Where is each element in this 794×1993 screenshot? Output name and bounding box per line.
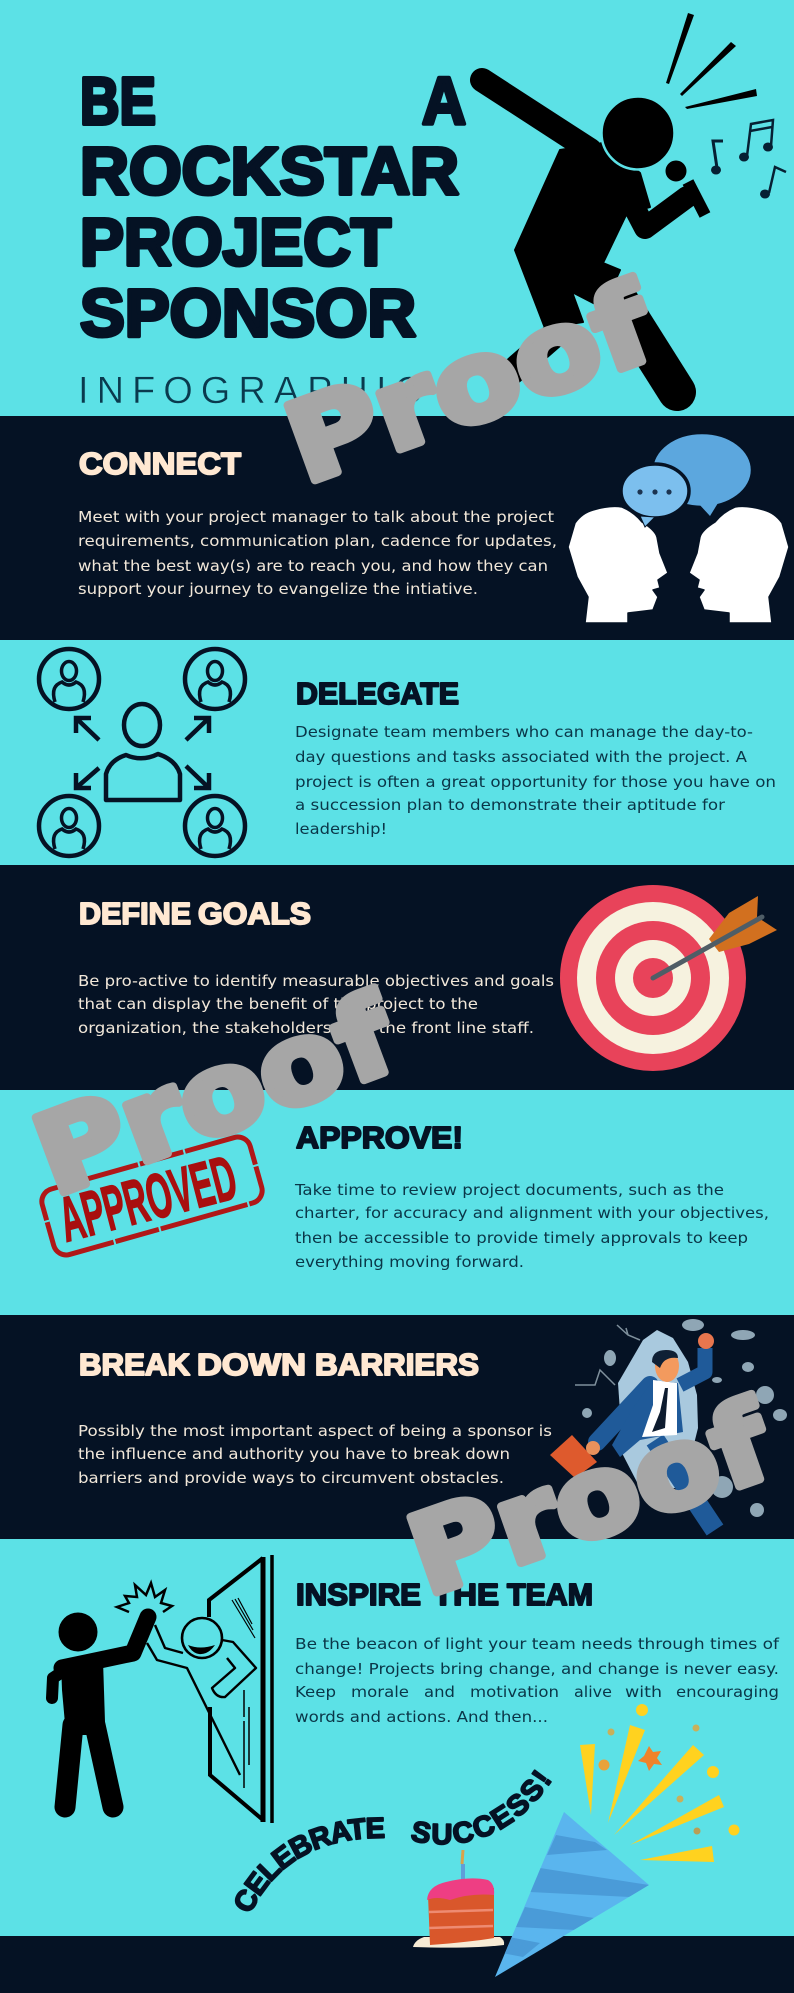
heading: break down barriers: BREAK [79, 1347, 191, 1382]
text: define goals: organization, the stakeholders, and the front line staff. [78, 1019, 534, 1037]
text: inspire the team: morale [351, 1683, 409, 1701]
text: break down barriers: the influence and authority you have to break down [78, 1445, 510, 1463]
text: connect: support your journey to evangelize the intiative. [78, 580, 478, 598]
watermark: proof top: Proof [270, 259, 670, 509]
text: inspire the team: with [625, 1683, 662, 1701]
panel: connect [78, 433, 789, 623]
text: inspire the team: motivation [470, 1683, 559, 1701]
text: delegate: a succession plan to demonstrate their aptitude for [295, 796, 726, 814]
text: approve: everything moving forward. [295, 1253, 524, 1271]
curved text: celebrate success: CELEBRATE [234, 1816, 385, 1912]
text: connect: Meet with your project manager to talk about the project [78, 508, 554, 526]
subtitle: INFOGRAPHIC [78, 370, 422, 412]
title [80, 64, 466, 351]
text: define goals [78, 972, 554, 1037]
icon: singing rockstar [482, 13, 786, 392]
icon: high five through mirror [52, 1555, 272, 1823]
text: define goals: Be pro-active to identify measurable objectives and goals [78, 972, 554, 990]
text: break down barriers: barriers and provide ways to circumvent obstacles. [78, 1469, 504, 1487]
heading: define goals [79, 896, 311, 931]
icon: businessman breaking through wall [550, 1319, 787, 1530]
heading: break down barriers: BARRIERS [315, 1347, 479, 1382]
text: connect [78, 508, 557, 598]
text: inspire the team: Be the beacon of light your team needs through times of [295, 1635, 780, 1653]
watermark: proof middle: Proof [18, 970, 412, 1221]
heading: break down barriers: DOWN [197, 1347, 306, 1382]
panel: break down barriers [78, 1319, 787, 1530]
curved text: celebrate success: SUCCESS! [410, 1769, 552, 1846]
text: delegate: day questions and tasks associated with the project. A [295, 748, 748, 766]
heading: inspire the team [296, 1577, 593, 1612]
title: A [422, 64, 466, 139]
heading: connect: CONNECT [79, 446, 241, 481]
curved text: celebrate success [234, 1769, 552, 1912]
heading: inspire the team: INSPIRE [296, 1577, 421, 1612]
heading: approve: APPROVE! [296, 1120, 463, 1155]
title: BE [80, 64, 156, 139]
heading: inspire the team: TEAM [507, 1577, 593, 1612]
watermark: proof bottom: Proof [393, 1376, 788, 1621]
icon: target with arrow [560, 885, 777, 1071]
text: approve: charter, for accuracy and alignment with your objectives, [295, 1204, 769, 1222]
heading: define goals: DEFINE [79, 896, 191, 931]
icon: approved stamp [39, 1134, 265, 1258]
text: delegate: project is often a great opportunity for those you have on [295, 773, 776, 791]
icon: delegating person [39, 649, 245, 856]
text: approve [294, 1181, 769, 1271]
text: inspire the team: Keep [295, 1683, 336, 1701]
heading: delegate: DELEGATE [296, 676, 459, 711]
text: inspire the team: alive [574, 1683, 612, 1701]
text: connect: requirements, communication plan, cadence for updates, [78, 532, 557, 550]
panel: approve [39, 1120, 769, 1271]
title: SPONSOR [80, 276, 416, 351]
panel: delegate [39, 649, 776, 856]
text: inspire the team: words and actions. And then... [295, 1708, 548, 1726]
panel: define goals [78, 885, 777, 1071]
text: define goals: that can display the benefit of the project to the [78, 995, 478, 1013]
text: delegate: leadership! [295, 820, 387, 838]
icon: talking heads [568, 433, 789, 623]
text: inspire the team: change! Projects bring change, and change is never easy. [295, 1660, 779, 1678]
heading: define goals: GOALS [198, 896, 311, 931]
icon: confetti [580, 1704, 740, 1862]
title: PROJECT [80, 205, 391, 280]
text: approve: then be accessible to provide timely approvals to keep [295, 1229, 748, 1247]
icon: approved stamp: APPROVED [52, 1143, 244, 1256]
icon: party popper cone [495, 1812, 649, 1977]
text: connect: what the best way(s) are to reach you, and how they can [78, 557, 548, 575]
text: inspire the team [295, 1635, 780, 1726]
text: break down barriers: Possibly the most important aspect of being a sponsor is [78, 1422, 552, 1440]
text: break down barriers [78, 1422, 552, 1487]
text: delegate: Designate team members who can manage the day-to- [295, 723, 753, 741]
heading: inspire the team: THE [433, 1577, 499, 1612]
panel: inspire the team [52, 1555, 780, 1823]
icon: birthday cake [413, 1850, 504, 1948]
text: inspire the team: encouraging [676, 1683, 779, 1701]
title: ROCKSTAR [80, 134, 459, 209]
text: delegate [295, 723, 776, 838]
heading: break down barriers [79, 1347, 479, 1382]
text: approve: Take time to review project documents, such as the [294, 1181, 724, 1199]
text: inspire the team: and [424, 1683, 455, 1701]
